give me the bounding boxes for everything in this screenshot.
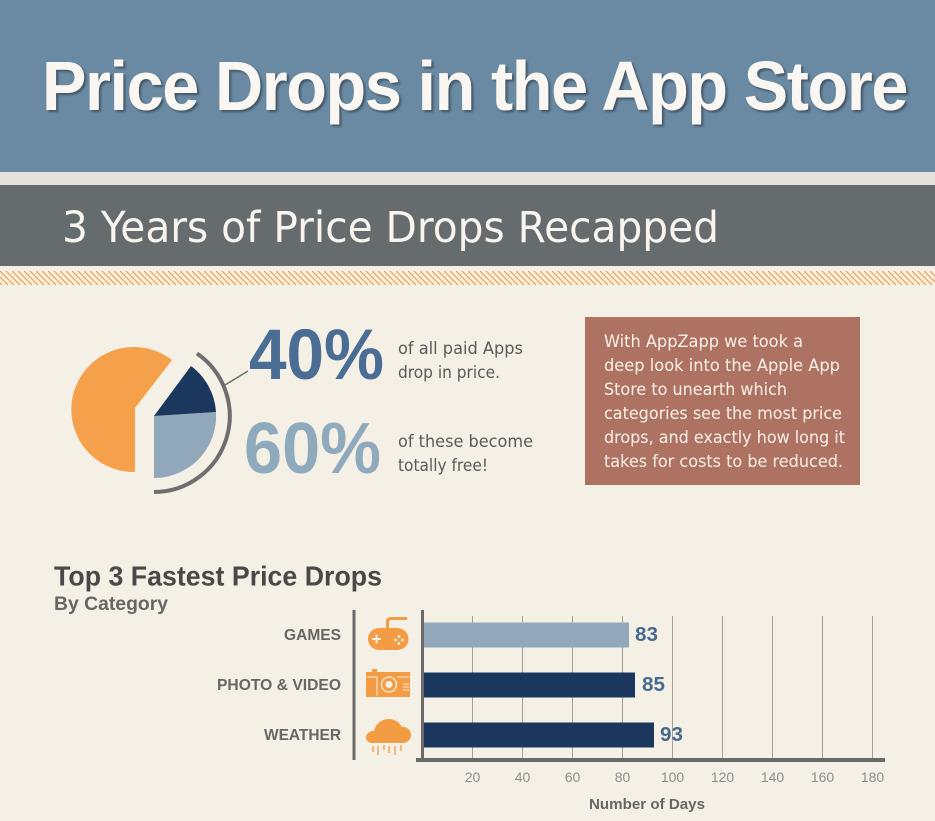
- stat: 40 percent: of all paid Apps: [398, 339, 523, 358]
- stat: 60 percent: totally free!: [398, 456, 488, 475]
- x axis title: Number of Days: [589, 796, 705, 813]
- subtitle: 3 Years of Price Drops Recapped: [62, 203, 719, 253]
- title: Price Drops in the App Store: [42, 47, 907, 125]
- icon: camera: [366, 669, 410, 697]
- stat: 40 percent: drop in price.: [398, 363, 500, 382]
- category labels: GAMES: [284, 627, 341, 644]
- section heading: [54, 560, 382, 615]
- x axis labels: 60: [565, 769, 580, 785]
- x axis labels: 140: [761, 769, 784, 785]
- callout box: takes for costs to be reduced.: [604, 452, 843, 471]
- x axis labels: 20: [465, 769, 480, 785]
- bar: photo and video 85: [424, 672, 635, 698]
- x axis labels: 100: [661, 769, 684, 785]
- stat: 60 percent: [244, 409, 533, 489]
- stat: 40 percent: 40%: [249, 316, 384, 395]
- pie chart: [71, 347, 248, 492]
- stat: 60 percent: of these become: [398, 432, 533, 451]
- bar: games 83: [424, 622, 629, 648]
- value labels: 93: [660, 724, 683, 746]
- category labels: [217, 627, 341, 744]
- x axis labels: 180: [861, 769, 884, 785]
- subtitle band: [0, 185, 935, 266]
- x axis labels: [465, 769, 884, 785]
- icon: rain cloud: [366, 719, 411, 755]
- callout box: With AppZapp we took a: [604, 332, 803, 351]
- x axis labels: 160: [811, 769, 834, 785]
- callout box: deep look into the Apple App: [604, 356, 840, 375]
- callout box: drops, and exactly how long it: [604, 428, 846, 447]
- header banner: [0, 0, 935, 185]
- section heading: Top 3 Fastest Price Drops: [54, 560, 382, 592]
- icon: game controller: [368, 618, 408, 650]
- bar chart: [416, 610, 885, 762]
- bar: weather 93: [424, 722, 654, 748]
- callout box: Store to unearth which: [604, 380, 787, 399]
- category labels: WEATHER: [264, 727, 341, 744]
- callout box: categories see the most price: [604, 404, 842, 423]
- value labels: 83: [635, 624, 658, 646]
- x axis labels: 80: [615, 769, 630, 785]
- stat: 40 percent: [249, 316, 523, 395]
- value labels: 85: [642, 674, 665, 696]
- section heading: By Category: [54, 594, 168, 615]
- value labels: [635, 624, 683, 746]
- x axis labels: 120: [711, 769, 734, 785]
- stat: 60 percent: 60%: [244, 409, 381, 489]
- category labels: PHOTO & VIDEO: [217, 677, 341, 694]
- x axis labels: 40: [515, 769, 530, 785]
- callout box: [585, 317, 860, 485]
